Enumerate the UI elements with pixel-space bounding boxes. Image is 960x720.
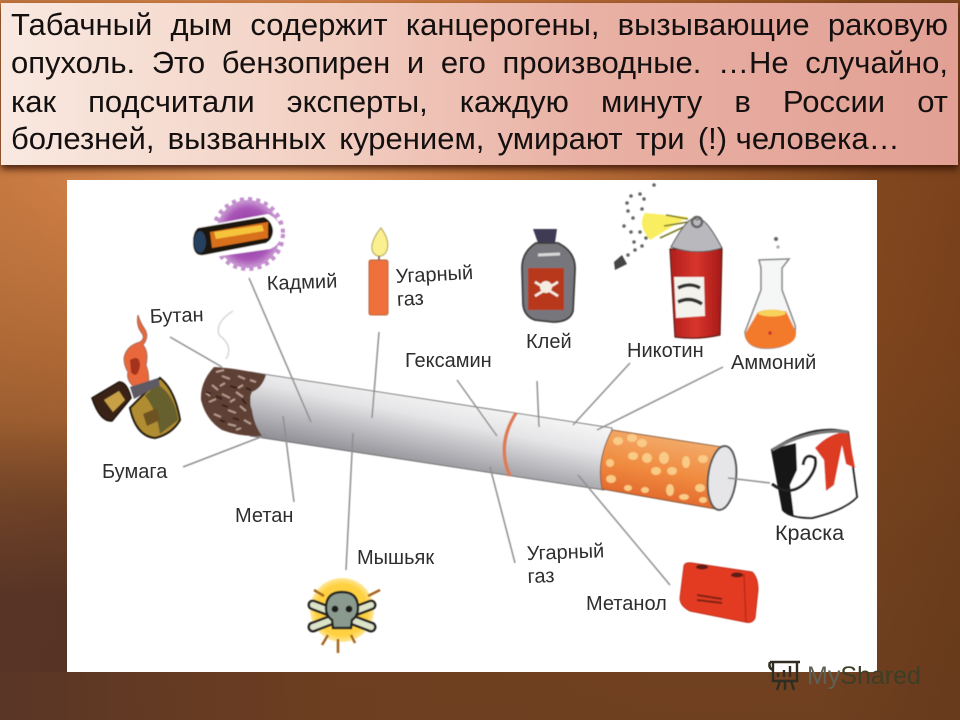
icon: lighter [92,315,180,438]
label: Метанол: Метанол [586,593,667,615]
logo wordmark: MyShared [807,662,921,690]
label: Бумага: Бумага [102,461,168,483]
label: Никотин: Никотин [627,340,704,362]
panel: illustration background [67,180,877,672]
icon: glue bottle [522,229,575,322]
lighter lid [92,382,131,421]
cigarette [201,311,739,511]
label: Краска: Краска [775,521,844,545]
burnt tobacco end [201,367,266,436]
icon: spray can [614,183,722,338]
fly [614,255,627,270]
label: Аммоний: Аммоний [731,352,816,374]
cigarette paper body [250,372,612,490]
icon: skull and crossbones [310,578,380,653]
orange band [504,413,516,476]
icon: paint can [771,430,857,518]
flame [124,315,149,387]
lighter body [130,378,180,438]
icon: flask [745,237,796,348]
filter speckles [606,434,708,503]
label: Угарный газ (bottom): газ [527,565,555,588]
icon: candle [369,228,388,315]
label: Угарный газ (top): газ [396,288,424,311]
label: Мышьяк: Мышьяк [357,547,434,569]
label: Угарный газ (top): Угарный [395,262,474,288]
label: Метан: Метан [235,505,293,527]
logo: MyShared watermark [769,662,921,690]
text line 3: как подсчитали эксперты, каждую минуту в России от [11,84,948,119]
panel: text callout [1,3,958,165]
cigarette filter [600,430,722,509]
label: Кадмий: Кадмий [266,271,338,295]
label: Угарный газ (bottom): Угарный [526,540,605,565]
label: Клей: Клей [526,331,572,353]
icon: presentation board [769,662,800,690]
smoke [218,311,233,359]
text line 4: болезней, вызванных курением, умирают три (!) человека… [11,121,900,156]
text line 2: опухоль. Это бензопирен и его производные. …Не случайно, [11,45,948,80]
can body [670,249,722,338]
label: Гексамин: Гексамин [405,350,492,372]
filter end [705,445,739,511]
label: Бутан: Бутан [149,304,204,328]
spray cone [642,213,688,240]
leader lines [170,278,770,585]
icon: methanol canister [680,563,758,622]
text line 1: Табачный дым содержит канцерогены, вызывающие раковую [11,7,948,42]
icon: battery (cadmium) [191,200,282,268]
purple burst [216,200,280,268]
